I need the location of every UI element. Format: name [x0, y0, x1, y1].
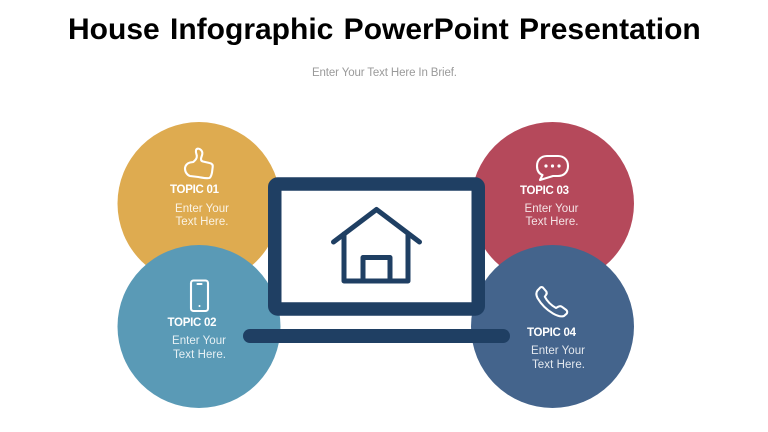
laptop base	[243, 329, 510, 343]
text: topic 02 description	[172, 335, 226, 361]
icon: smartphone	[191, 280, 208, 311]
title: House Infographic PowerPoint Presentation	[68, 13, 701, 46]
text: topic 01 description	[175, 203, 229, 228]
label: topic 01: TOPIC 01	[170, 184, 220, 196]
laptop screen	[275, 184, 478, 309]
panel: topic 03	[471, 122, 634, 285]
icon: house	[334, 210, 420, 281]
label: topic 04: TOPIC 04	[527, 327, 577, 339]
subtitle: Enter Your Text Here In Brief.	[312, 67, 457, 79]
text: topic 01 description: Enter Your	[175, 203, 229, 215]
panel: topic 01	[118, 122, 280, 285]
text: topic 03 description: Enter Your	[524, 203, 579, 215]
label: topic 02: TOPIC 02	[168, 317, 216, 329]
icon: telephone	[536, 287, 567, 316]
panel: topic 04	[471, 245, 634, 408]
text: topic 03 description: Text Here.	[526, 216, 578, 228]
label: topic 03: TOPIC 03	[520, 185, 569, 197]
text: topic 02 description: Text Here.	[173, 349, 226, 361]
icon: thumbs up	[185, 149, 213, 178]
panel: topic 02	[118, 245, 280, 408]
icon: speech bubble	[537, 156, 568, 180]
text: topic 04 description: Text Here.	[532, 359, 585, 371]
text: topic 01 description: Text Here.	[176, 216, 228, 228]
text: topic 03 description	[524, 203, 579, 228]
text: topic 04 description: Enter Your	[531, 345, 585, 357]
laptop	[243, 184, 510, 343]
text: topic 04 description	[531, 345, 585, 371]
text: topic 02 description: Enter Your	[172, 335, 226, 347]
